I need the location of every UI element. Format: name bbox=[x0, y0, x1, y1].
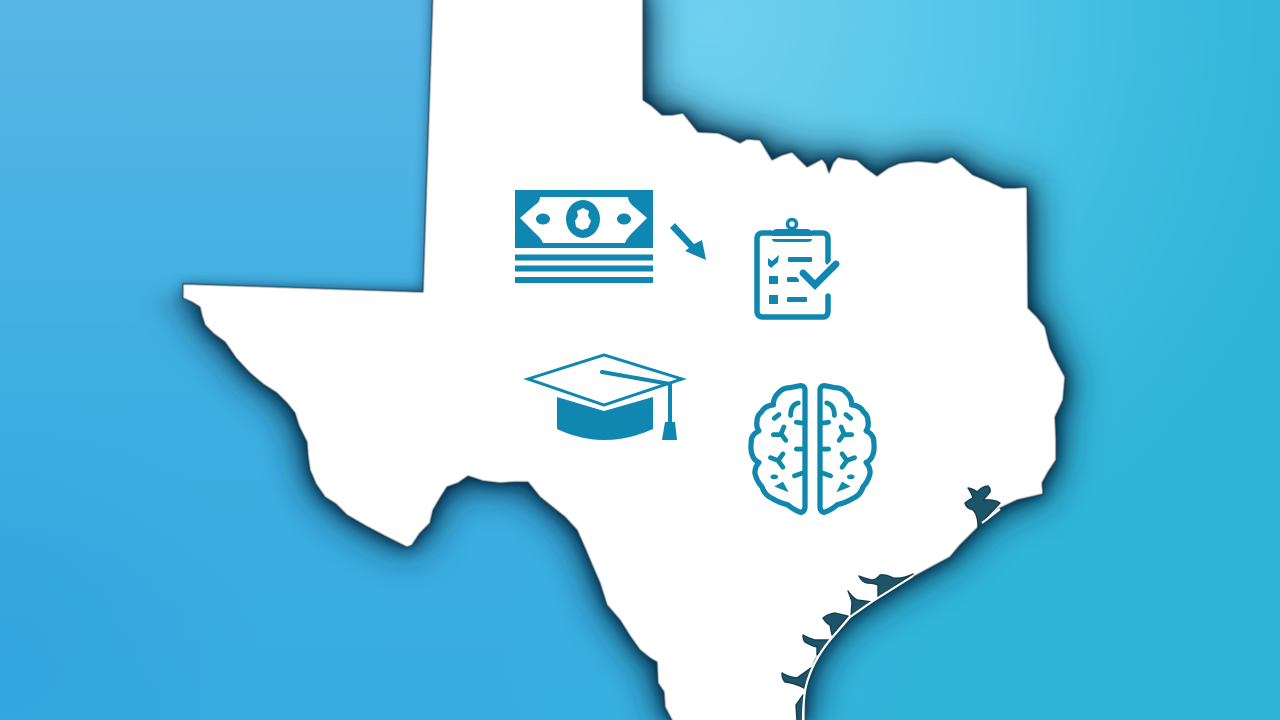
left hemisphere bbox=[751, 386, 805, 512]
icon: graduation cap bbox=[528, 355, 682, 440]
coastal bays bbox=[782, 486, 1000, 720]
map shadow bbox=[183, 0, 1065, 720]
barrier islands bbox=[803, 509, 1000, 720]
icon: brain bbox=[751, 386, 874, 512]
map of Texas bbox=[183, 0, 1065, 720]
arrow bbox=[670, 223, 706, 260]
icon: clipboard with checklist bbox=[757, 220, 837, 317]
icon: stack of money bbox=[515, 190, 653, 283]
right hemisphere bbox=[820, 386, 874, 512]
